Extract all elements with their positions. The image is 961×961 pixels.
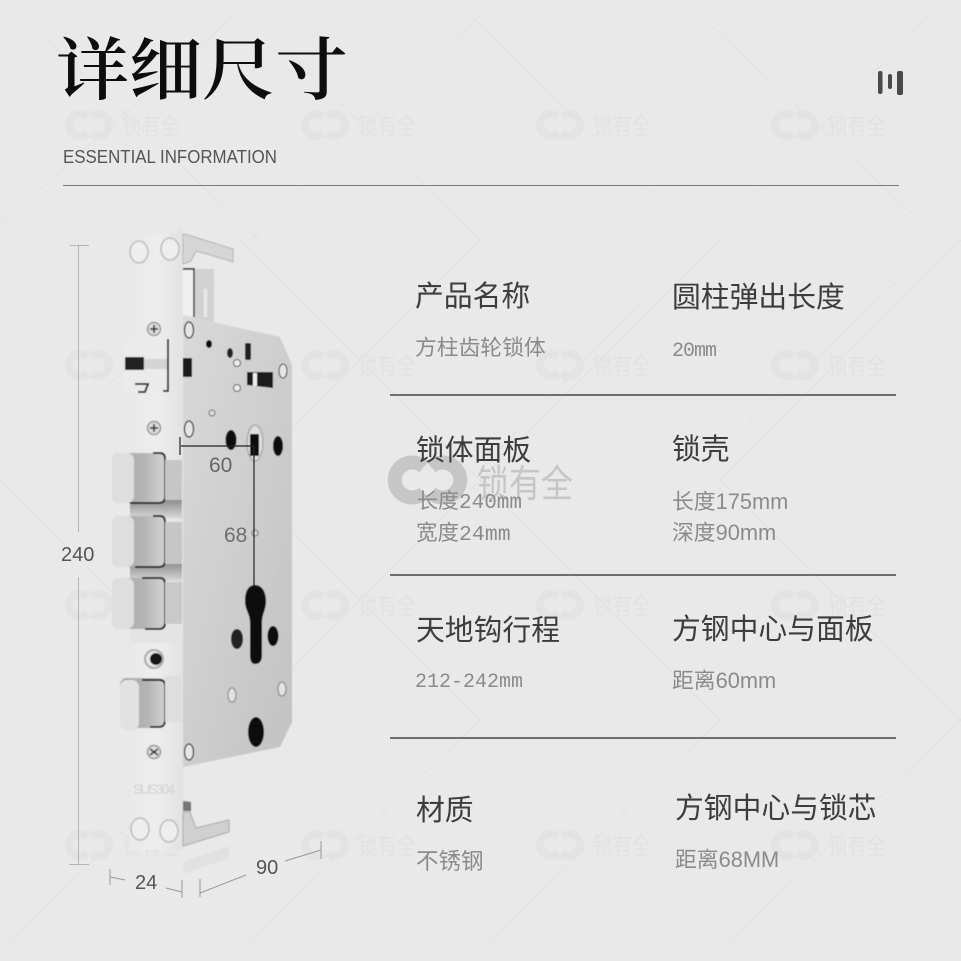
spec row 2 [416,434,788,547]
reflection [183,846,229,874]
latch [124,339,170,392]
spec: material [416,795,484,874]
watermark logos: 锁有全 [828,593,886,620]
spec: cylinder bolt length [672,282,845,363]
watermark logos: 锁有全 [593,353,651,380]
spec: hook travel: 天地钩行程 [416,615,560,647]
lock illustration [112,229,292,874]
icon: three bars [878,71,903,95]
dimension: 240 height [61,246,94,864]
watermark logos: 锁有全 [122,593,180,620]
spec: cylinder bolt length: 圆柱弹出长度 [672,282,845,314]
dimension: 68: 68 [224,524,247,547]
spec: spindle to faceplate [672,614,874,693]
spec: cylinder bolt length: 20mm [672,340,717,363]
subtitle: ESSENTIAL INFORMATION [63,146,277,167]
spec: faceplate: 锁体面板 [416,435,531,467]
top hook [183,234,233,327]
spec: faceplate: 宽度24mm [416,521,511,547]
central watermark logo [395,462,573,506]
watermark logos: 锁有全 [593,593,651,620]
dimension: 60: 60 [209,454,232,477]
side bolts [112,453,182,730]
watermark logos: 锁有全 [358,593,416,620]
spec: case: 深度90mm [672,520,776,545]
spec: case: 长度175mm [672,489,788,514]
dimension: 68 [224,446,254,586]
faceplate: SUS304 [133,781,175,797]
case holes [183,322,287,760]
title: 详细尺寸 [56,33,348,109]
watermark logos: 锁有全 [593,113,651,140]
spec row 1 [415,281,845,363]
spec: case [672,434,788,545]
dimension: 24 [110,869,182,898]
watermark logos: 锁有全 [358,833,416,860]
divider [390,394,896,396]
spec row 4 [416,793,877,874]
spec: spindle to cylinder: 距离68MM [675,847,779,872]
bottom hook [183,801,229,846]
spec: spindle to cylinder: 方钢中心与锁芯 [675,793,877,825]
header rule [63,184,899,186]
watermark logos: 锁有全 [122,113,180,140]
spec: spindle to cylinder [675,793,877,872]
watermark logos: 锁有全 [122,353,180,380]
divider [390,737,896,739]
spec row 3 [415,614,874,694]
watermark logos: 锁有全 [593,833,651,860]
dimension: 24: 24 [135,872,157,894]
watermark logos: 锁有全 [358,113,416,140]
faceplate [130,229,183,850]
central watermark logo: 锁有全 [477,464,573,506]
watermark logos: 锁有全 [358,353,416,380]
dimension: 90: 90 [256,857,278,879]
watermark logos: 锁有全 [122,833,180,860]
spec: faceplate: 长度240mm [417,490,522,515]
spec: spindle to faceplate: 距离60mm [672,668,776,693]
watermark logos: 锁有全 [828,113,886,140]
watermark logos: 锁有全 [828,353,886,380]
spec: material: 材质 [416,795,474,827]
spec: material: 不锈钢 [416,849,484,874]
lock case [183,315,292,767]
spec: hook travel: 212-242mm [415,671,523,694]
dimension: 240 height: 240 [61,544,94,566]
spec: faceplate [416,435,531,547]
spec: spindle to faceplate: 方钢中心与面板 [672,614,874,646]
dimension: 90 [200,841,321,897]
spec: product name: 方柱齿轮锁体 [415,335,546,360]
watermark logos: 锁有全 [828,833,886,860]
watermark logos [69,113,886,860]
spec: product name [415,281,546,360]
spec: hook travel [415,615,560,694]
dimension: 60 [180,437,254,477]
spec: product name: 产品名称 [415,281,530,313]
spec: case: 锁壳 [672,434,730,466]
divider [390,574,896,576]
